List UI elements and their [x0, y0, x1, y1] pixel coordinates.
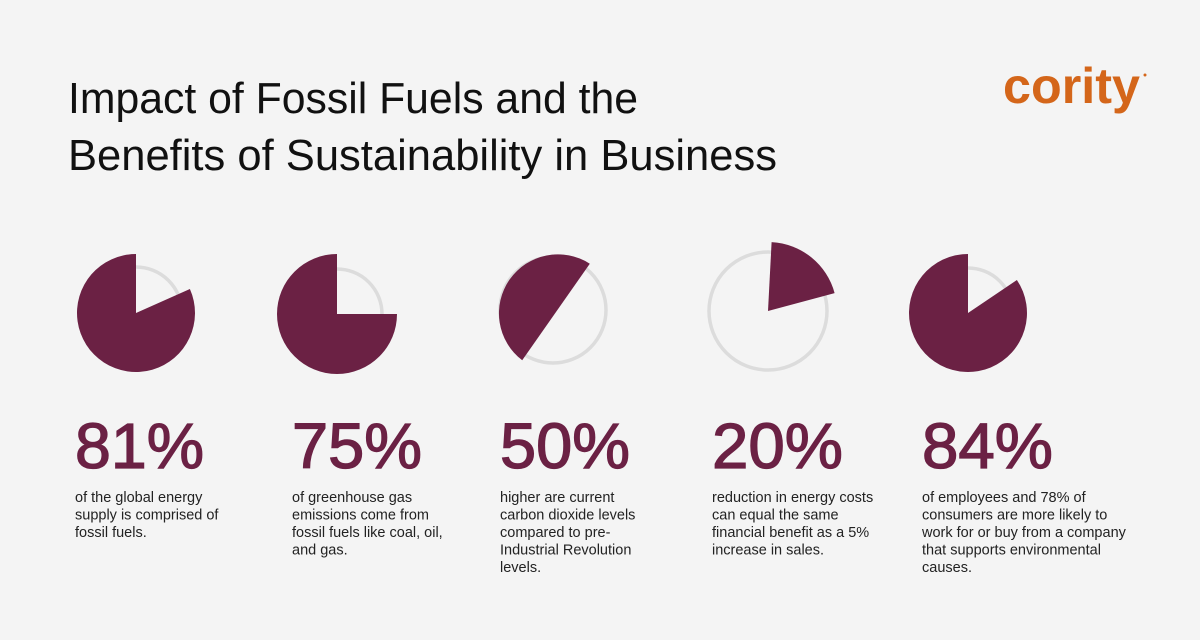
stat 5: 84%: [909, 254, 1127, 576]
title: Impact of Fossil Fuels and the: [68, 74, 638, 123]
stat 3: 50%: [499, 254, 635, 576]
description 4: increase in sales.: [712, 542, 824, 558]
description 5: of employees and 78% of: [922, 490, 1087, 506]
description 5: consumers are more likely to: [922, 508, 1107, 524]
description 3: Industrial Revolution: [500, 542, 631, 558]
description 2: emissions come from: [292, 508, 429, 524]
description 4: can equal the same: [712, 508, 839, 524]
pie chart 81%: [77, 254, 195, 372]
description 1: of the global energy: [75, 490, 203, 506]
pie chart 20%: [709, 242, 835, 370]
stat 2: 75%: [277, 254, 443, 558]
description 3: carbon dioxide levels: [500, 508, 635, 524]
number 75%: 75%: [292, 410, 422, 482]
pie chart 84%: [909, 254, 1027, 372]
number 81%: 81%: [75, 410, 204, 482]
description 3: higher are current: [500, 490, 614, 506]
pie chart 75%: [277, 254, 397, 374]
description 5: that supports environmental: [922, 542, 1101, 558]
description 5: work for or buy from a company: [921, 525, 1127, 541]
description 2: and gas.: [292, 542, 348, 558]
description 1: fossil fuels.: [75, 525, 147, 541]
number 50%: 50%: [500, 410, 630, 482]
description 4: financial benefit as a 5%: [712, 525, 869, 541]
number 20%: 20%: [712, 410, 843, 482]
description 2: fossil fuels like coal, oil,: [292, 525, 443, 541]
number 84%: 84%: [922, 410, 1053, 482]
stat 1: 81%: [75, 254, 219, 541]
title: Benefits of Sustainability in Business: [68, 131, 777, 180]
description 1: supply is comprised of: [75, 508, 219, 524]
pie chart 50%: [499, 254, 606, 363]
description 2: of greenhouse gas: [292, 490, 412, 506]
description 4: reduction in energy costs: [712, 490, 873, 506]
title: [68, 74, 777, 180]
logo: cority: cority: [1003, 58, 1140, 114]
description 3: levels.: [500, 560, 541, 576]
description 3: compared to pre-: [500, 525, 611, 541]
description 5: causes.: [922, 560, 972, 576]
stat 4: 20%: [709, 242, 873, 558]
